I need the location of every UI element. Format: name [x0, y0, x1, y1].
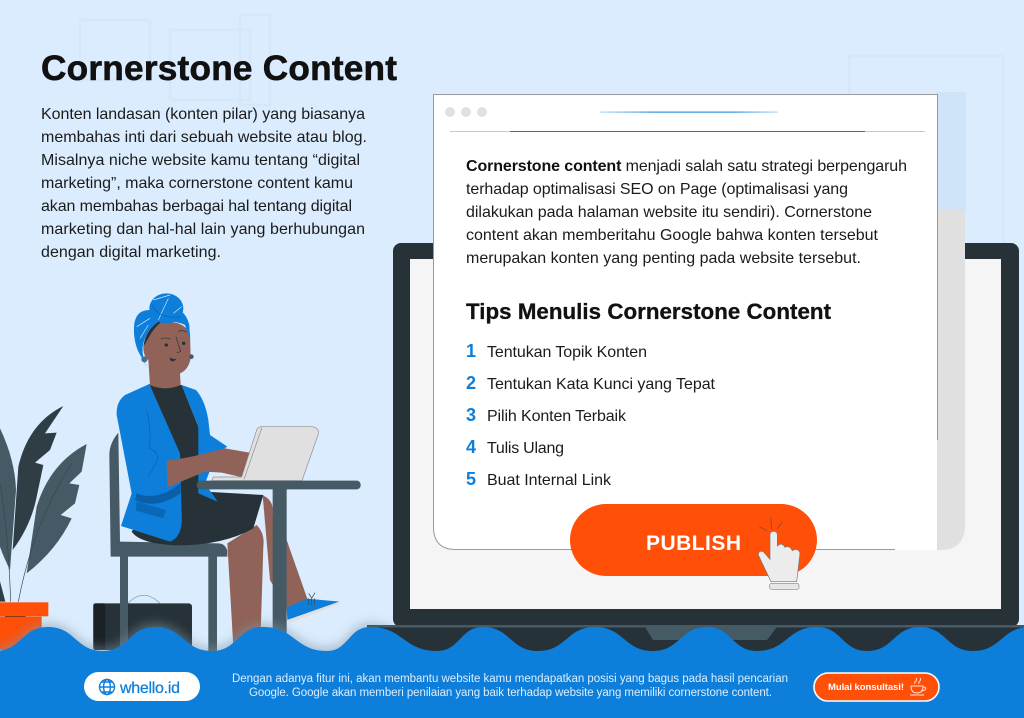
tips list: 2: [466, 373, 476, 393]
tips list: Tulis Ulang: [487, 440, 564, 457]
footer text: [232, 673, 788, 699]
tips list: 3: [466, 405, 476, 425]
intro paragraph: Misalnya niche website kamu tentang “digital: [41, 152, 360, 169]
address bar line: [600, 112, 778, 113]
header divider: [450, 131, 925, 132]
footer text: Google. Google akan memberi penilaian yang baik terhadap website yang memiliki cornerstone content.: [249, 687, 772, 699]
intro paragraph: akan membahas berbagai hal tentang digital: [41, 198, 352, 215]
publish button: [570, 504, 817, 589]
page shadow panel behind window: [936, 92, 966, 212]
icon: leaves: [0, 406, 87, 602]
icon: pot: [0, 602, 48, 650]
wave shadow: [0, 623, 437, 714]
body paragraph: content akan memberitahu Google bahwa konten tersebut: [466, 227, 879, 244]
tips list: Buat Internal Link: [487, 472, 612, 489]
button label: Mulai konsultasi!: [828, 682, 904, 693]
browser window: [433, 94, 938, 550]
desk: [197, 481, 361, 638]
title: Cornerstone Content: [41, 49, 397, 88]
chair: [109, 433, 227, 653]
body paragraph: merupakan konten yang penting pada website tersebut.: [466, 250, 861, 267]
tips list: Pilih Konten Terbaik: [487, 408, 627, 425]
body paragraph: terhadap optimalisasi SEO on Page (optimalisasi yang: [466, 181, 848, 198]
intro paragraph: dengan digital marketing.: [41, 244, 221, 261]
intro paragraph: [41, 106, 367, 261]
tips list: Tentukan Topik Konten: [487, 344, 647, 361]
icon: globe: [100, 680, 114, 694]
tips list: Tentukan Kata Kunci yang Tepat: [487, 376, 716, 393]
logo text: whello.id: [119, 680, 180, 697]
icon: coffee cup: [910, 678, 926, 695]
footer text: Dengan adanya fitur ini, akan membantu website kamu mendapatkan posisi yang bagus pada hasil pencarian: [232, 673, 788, 685]
turban: [134, 293, 190, 368]
window dots: [445, 107, 487, 117]
window panel: [433, 94, 937, 550]
laptop screen: [410, 259, 1001, 609]
body paragraph: [466, 158, 907, 267]
gray page behind window: [936, 210, 965, 550]
tips list: 4: [466, 437, 476, 457]
neck and head: [141, 321, 194, 388]
laptop base: [367, 625, 1024, 655]
consult button: [814, 673, 939, 701]
laptop: [212, 427, 318, 481]
laptop stand: [645, 627, 777, 640]
bag: [93, 595, 192, 650]
arm: [167, 448, 249, 487]
body paragraph: Cornerstone content menjadi salah satu strategi berpengaruh: [466, 158, 907, 175]
dress: [132, 384, 263, 545]
laptop body: [393, 243, 1019, 627]
blazer: [117, 384, 227, 542]
button label: PUBLISH: [646, 532, 741, 555]
tips list: 5: [466, 469, 476, 489]
footer logo pill: [84, 672, 200, 701]
tips list: 1: [466, 341, 476, 361]
body paragraph: dilakukan pada halaman website itu sendiri). Cornerstone: [466, 204, 872, 221]
far leg and shoe: [263, 495, 341, 623]
plant: [0, 406, 87, 650]
intro paragraph: Konten landasan (konten pilar) yang biasanya: [41, 106, 365, 123]
intro paragraph: marketing dan hal-hal lain yang berhubungan: [41, 221, 365, 238]
tips heading: Tips Menulis Cornerstone Content: [466, 299, 832, 324]
intro paragraph: membahas inti dari sebuah website atau blog.: [41, 129, 367, 146]
laptop: [367, 243, 1024, 655]
woman at desk illustration: [93, 293, 361, 653]
intro paragraph: marketing”, maka cornerstone content kamu: [41, 175, 353, 192]
footer wave band: [0, 627, 1024, 718]
tips list: [466, 341, 716, 489]
near leg: [227, 525, 264, 647]
icon: pointing hand: [758, 517, 800, 589]
background faint shapes: [80, 15, 1003, 246]
